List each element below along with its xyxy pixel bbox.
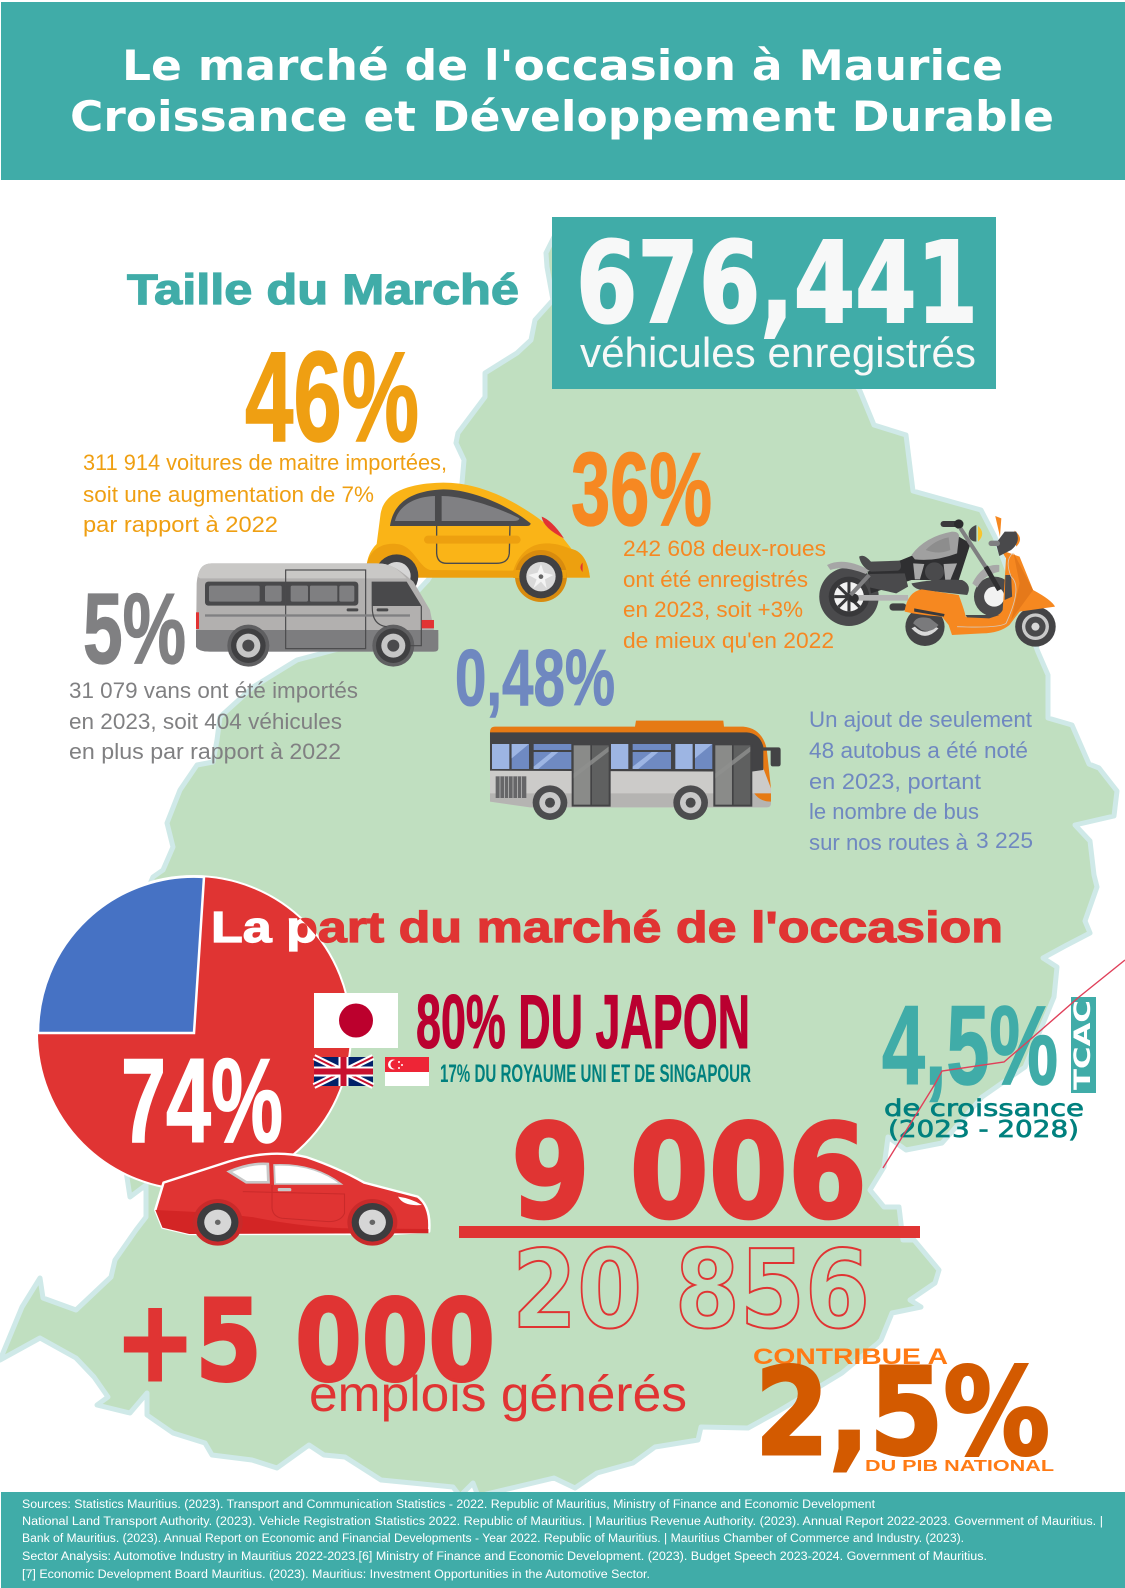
- big number: 676,441: [576, 219, 978, 349]
- heading: taille du marché: Taille du Marché: [127, 266, 519, 314]
- icon: flag of United Kingdom: [314, 1057, 373, 1086]
- text: buses: en 2023, portant: [809, 769, 982, 794]
- text: emplois générés: emplois générés: [309, 1366, 687, 1422]
- icon: red car: [155, 1154, 429, 1246]
- text: de croissance: de croissance: [884, 1096, 1084, 1122]
- heading overlay on the pie: La part du marché de l'occasion: [211, 903, 1003, 952]
- text: vans: en 2023, soit 404 véhicules: [69, 709, 342, 734]
- stat: 2,5%: 2,5%: [755, 1344, 1050, 1483]
- big number caption: véhicules enregistrés: [580, 329, 976, 376]
- footer: sources: Sources: Statistics Mauritius. (2023). Transport and Communication Statistics - 2022. Republic of Mauritius, Ministry of Finance and Economic Development: [22, 1499, 876, 1511]
- text: cars: 311 914 voitures de maitre importées,: [83, 450, 447, 475]
- text: de croissance: (2023 - 2028): [888, 1117, 1079, 1143]
- text: du PIB national: DU PIB NATIONAL: [865, 1458, 1054, 1475]
- stat: +5 000: +5 000: [115, 1277, 495, 1407]
- footer: sources: National Land Transport Authority. (2023). Vehicle Registration Statistics 2022. Republic of Mauritius. | Mauritius Revenue Authority. (2023). Annual Report 2022-2023. Government of Mauritius. |: [22, 1516, 1103, 1528]
- text: two wheelers: en 2023, soit +3%: [623, 597, 803, 622]
- text: buses: 3 225: [976, 828, 1033, 853]
- panel: total vehicles: [552, 217, 996, 389]
- stat: 46%: 46%: [245, 326, 419, 469]
- footer: sources: [1, 1492, 1125, 1588]
- pie chart: 74%: [37, 876, 351, 1190]
- text: de croissance: [884, 1096, 1084, 1143]
- text: vans: en plus par rapport à 2022: [69, 739, 341, 764]
- stat: 36%: 36%: [571, 432, 712, 548]
- text: buses: le nombre de bus: [809, 799, 979, 824]
- stat: 9 006: 9 006: [511, 1096, 867, 1248]
- icon: grey van: [196, 563, 438, 667]
- text: buses: [809, 707, 1033, 855]
- text: two wheelers: de mieux qu'en 2022: [623, 628, 834, 653]
- text: buses: 48 autobus a été noté: [809, 738, 1028, 763]
- text: cars: [83, 450, 447, 537]
- text: cars: soit une augmentation de 7%: [83, 482, 374, 507]
- text: buses: Un ajout de seulement: [809, 707, 1033, 732]
- title line 2: Croissance et Développement Durable: [70, 92, 1054, 141]
- label: TCAC: [1071, 997, 1096, 1093]
- footer: sources: [7] Economic Development Board Mauritius. (2023). Mauritius: Investment Opportunities in the Automotive Sector.: [22, 1569, 650, 1581]
- title line 1: Le marché de l'occasion à Maurice: [122, 41, 1003, 90]
- stat: 0,48%: 0,48%: [455, 633, 615, 722]
- text: two wheelers: 242 608 deux-roues: [623, 536, 826, 561]
- heading: part du marché: La part du marché de l'occasion: [211, 903, 1003, 952]
- icon: flag of Singapore: [385, 1057, 429, 1086]
- text: two wheelers: ont été enregistrés: [623, 567, 808, 592]
- text: cars: par rapport à 2022: [83, 512, 278, 537]
- stat: 17% UK and Singapore: 17% DU ROYAUME UNI ET DE SINGAPOUR: [440, 1060, 751, 1088]
- text: contribue a: CONTRIBUE A: [753, 1344, 948, 1369]
- text: buses: sur nos routes à: [809, 830, 968, 855]
- footer: sources: Bank of Mauritius. (2023). Annual Report on Economic and Financial Developments - Year 2022. Republic of Mauritius. | Mauritius Chamber of Commerce and Industry. (2023).: [22, 1533, 964, 1545]
- icon: flag of Japan: [314, 993, 398, 1048]
- icon: bus: [490, 721, 781, 820]
- stat: 5%: 5%: [83, 573, 186, 685]
- text: two wheelers: [623, 536, 834, 653]
- stat: 20 856: 20 856: [512, 1228, 870, 1353]
- pie value 74%: 74%: [121, 1034, 283, 1168]
- footer: sources: Sector Analysis: Automotive Industry in Mauritius 2022-2023.[6] Ministry of Finance and Economic Development. (2023). Budget Speech 2023-2024. Government of Mauritius.: [22, 1551, 987, 1563]
- text: vans: [69, 678, 358, 764]
- background map of Mauritius: [0, 225, 1117, 1496]
- fraction bar: [459, 1226, 920, 1238]
- label: TCAC: TCAC: [1071, 1000, 1096, 1090]
- icon: yellow car: [367, 483, 590, 602]
- stat: 80% du Japon: 80% DU JAPON: [416, 980, 750, 1065]
- growth trend line: [883, 960, 1125, 1168]
- icon: motorcycle and scooter: [819, 516, 1056, 647]
- text: vans: 31 079 vans ont été importés: [69, 678, 358, 703]
- header banner: [1, 2, 1125, 180]
